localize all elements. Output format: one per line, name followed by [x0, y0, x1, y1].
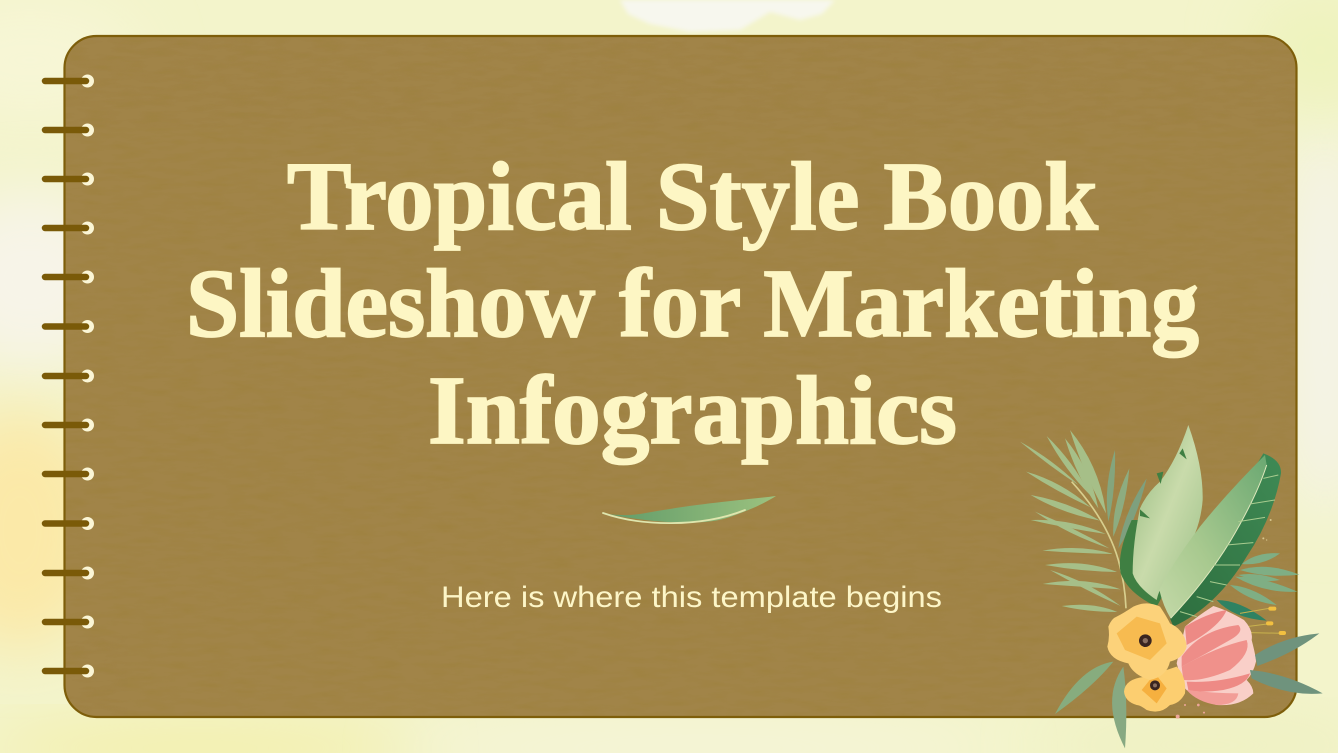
icon: upper yellow flower: [1107, 603, 1187, 680]
leaf divider: [603, 496, 776, 523]
title: Tropical Style Book: [287, 143, 1098, 250]
icon: dark banana leaf: [1159, 453, 1281, 627]
icon: lower yellow flower: [1124, 667, 1185, 712]
title: Infographics: [428, 357, 957, 464]
icon: paint splatter: [1176, 519, 1272, 719]
title: [186, 143, 1199, 464]
icon: palm frond: [1020, 430, 1147, 612]
spiral binding rings: [45, 74, 94, 678]
tropical floral bouquet: [1020, 425, 1323, 748]
icon: pale banana leaf: [1120, 425, 1203, 607]
icon: pink protea flower: [1177, 606, 1286, 705]
icon: grey-green side leaves: [1055, 633, 1323, 748]
icon: right back fronds: [1217, 553, 1299, 621]
title: Slideshow for Marketing: [186, 250, 1199, 357]
subtitle: Here is where this template begins: [441, 581, 942, 614]
